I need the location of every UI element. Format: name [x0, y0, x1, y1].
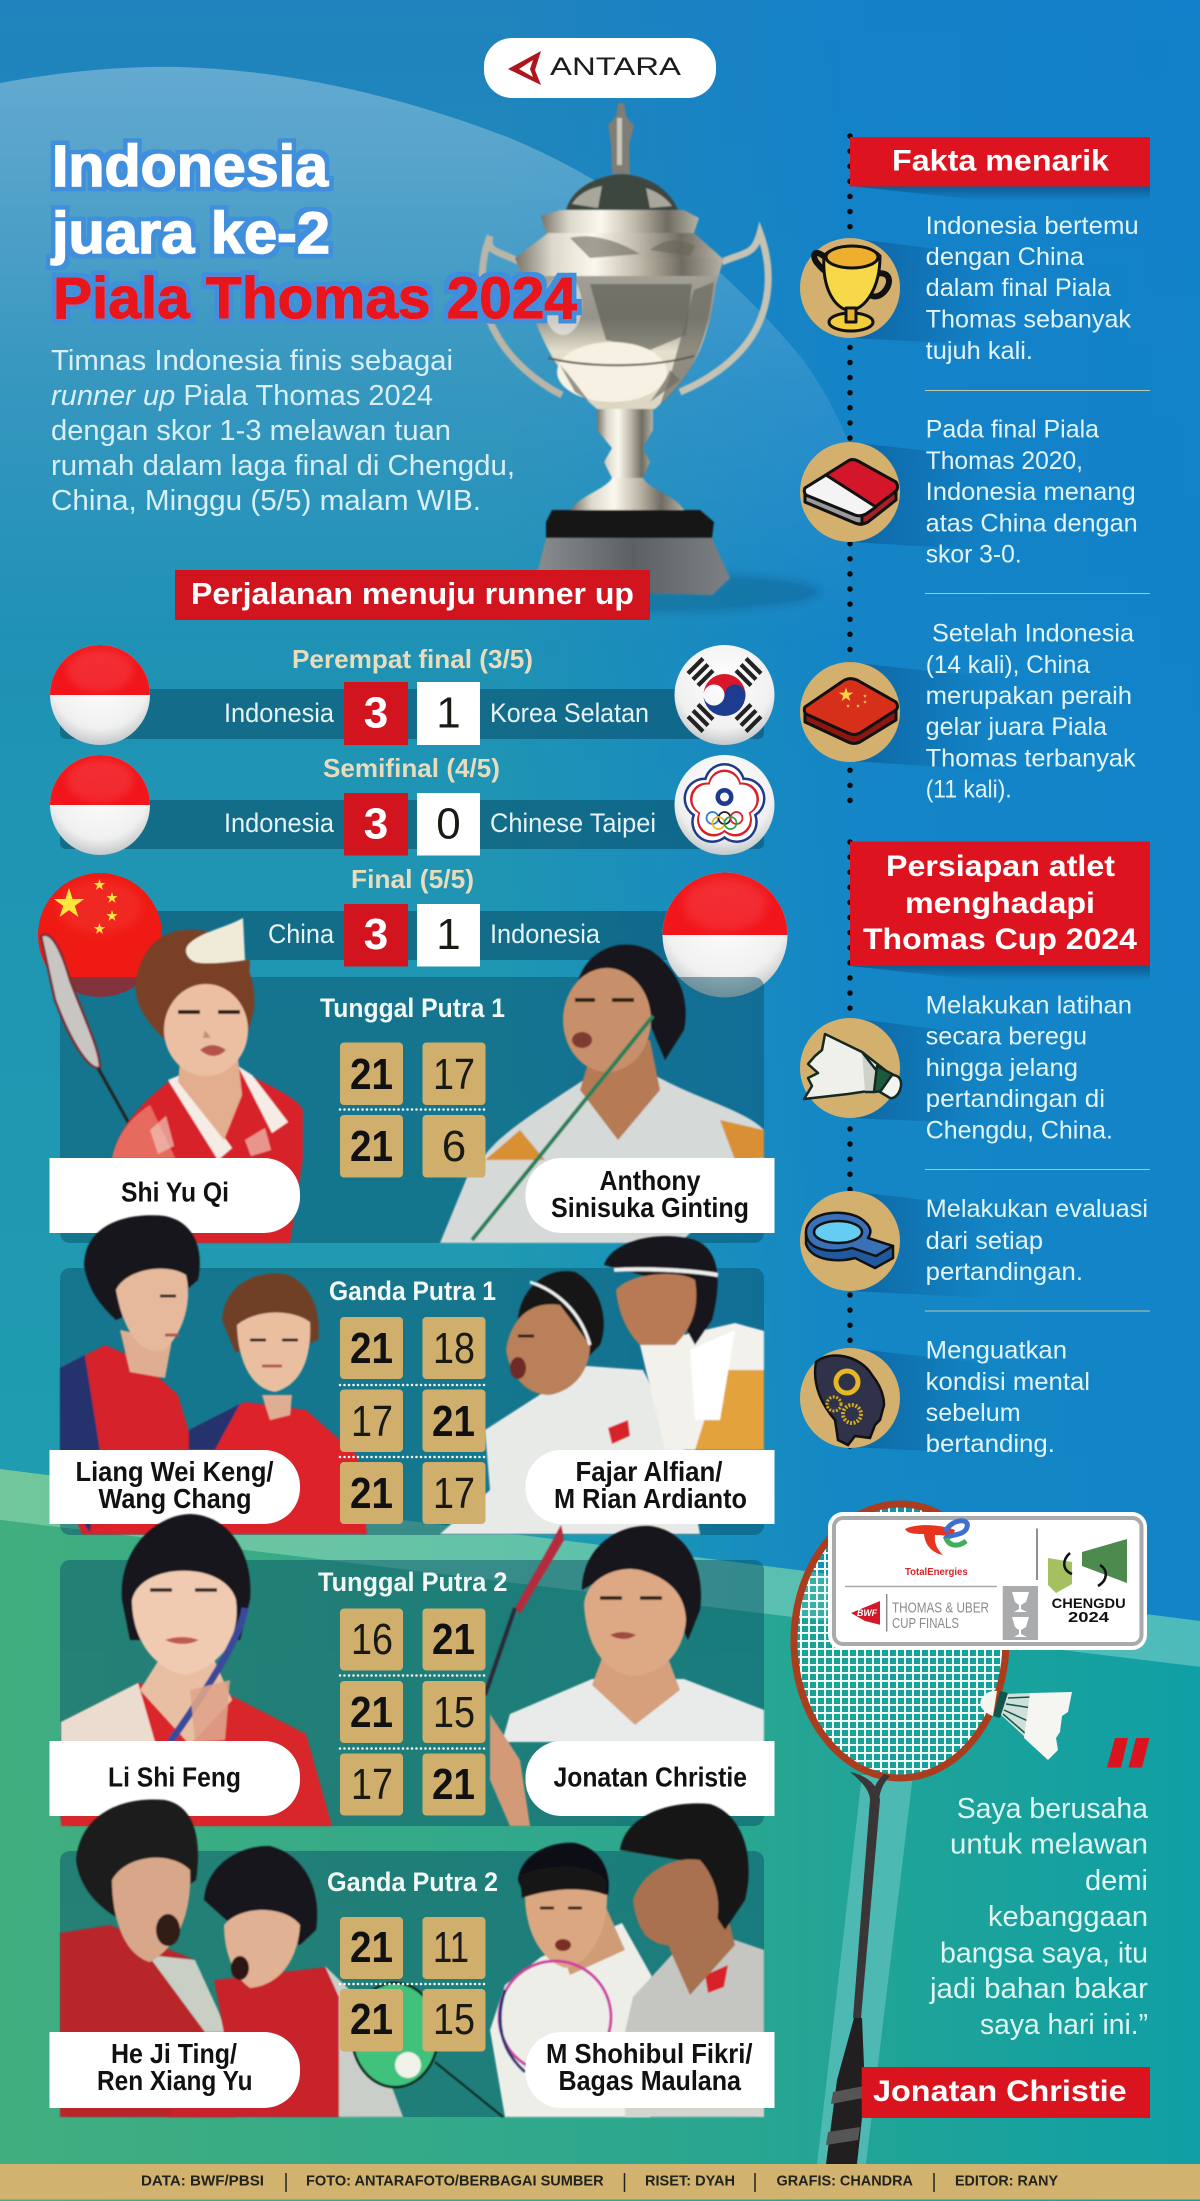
fact 3: [800, 662, 990, 770]
logo: BWF: BWF: [857, 1608, 877, 1618]
icon: antara arrow: [508, 51, 541, 85]
round: final: Final (5/5): [351, 864, 474, 894]
round: perempat final: [50, 644, 774, 745]
player photo: Liang Wei Keng: [60, 1215, 200, 1534]
name tab: Anthony Sinisuka Ginting: Sinisuka Ginting: [551, 1192, 749, 1223]
step 1 text: Melakukan latihan: [926, 992, 1132, 1020]
name tab: Fajar Alfian / M Rian Ardianto: M Rian Ardianto: [554, 1483, 747, 1514]
score boxes: 17: [351, 1397, 393, 1446]
logo: BWF: [851, 1601, 880, 1625]
fact 2 text: Indonesia menang: [926, 478, 1136, 506]
panel: Tunggal Putra 2: [50, 1514, 774, 1826]
logo box: Thomas & Uber Cup Finals: [828, 1512, 1147, 1650]
fact 1 text: dalam final Piala: [926, 274, 1111, 302]
heading: Ganda Putra 2: Ganda Putra 2: [327, 1867, 498, 1897]
fact 3 text: [926, 620, 1136, 804]
quote: [862, 1738, 1150, 2118]
fact 1 text: Indonesia bertemu: [926, 212, 1139, 240]
logo text: Thomas and Uber Cup Finals: [892, 1599, 989, 1632]
player photo: Anthony Sinisuka Ginting: [440, 945, 764, 1243]
heading: Fakta menarik: [850, 137, 1150, 200]
name tab: Liang Wei Keng / Wang Chang: [50, 1450, 300, 1524]
round: final: 1: [436, 910, 461, 959]
score boxes: 6: [442, 1122, 466, 1171]
fact 2: [800, 442, 990, 550]
heading: Persiapan atlet menghadapi Thomas Cup 2024: menghadapi: [905, 887, 1095, 920]
icon: quote mark: [1107, 1738, 1150, 1768]
name tab: Li Shi Feng: [50, 1741, 300, 1816]
name tab: M Shohibul Fikri / Bagas Maulana: [526, 2032, 774, 2108]
round: final: 3: [364, 910, 388, 959]
player photo: Fajar Alfian: [440, 1271, 700, 1534]
icon: shuttlecock near racket: [980, 1691, 1072, 1760]
panel: Persiapan atlet: [800, 842, 1150, 1458]
intro text: rumah dalam laga final di Chengdu,: [51, 450, 515, 482]
icon: trophy: [814, 246, 889, 331]
logo: ANTARA: [484, 38, 716, 98]
name tab: Shi Yu Qi: [50, 1158, 300, 1233]
round: final: Indonesia: [490, 919, 601, 949]
name tab: Anthony Sinisuka Ginting: [526, 1158, 774, 1233]
fact 2 text: [926, 416, 1138, 569]
logo: Chengdu 2024: [1048, 1539, 1127, 1626]
logo text: Thomas and Uber Cup Finals: THOMAS & UBER: [892, 1599, 989, 1616]
intro text: dengan skor 1-3 melawan tuan: [51, 415, 451, 447]
step 1 text: pertandingan di: [926, 1085, 1105, 1113]
quote text: jadi bahan bakar: [929, 1973, 1148, 2005]
heading: Persiapan atlet menghadapi Thomas Cup 2024: [850, 842, 1150, 980]
name tab: Li Shi Feng: Li Shi Feng: [108, 1762, 241, 1792]
footer credits: DATA: BWF/PBSI: [141, 2173, 264, 2190]
name tab: Fajar Alfian / M Rian Ardianto: Fajar Alfian/: [576, 1456, 723, 1487]
quote text: kebanggaan: [988, 1901, 1148, 1933]
quote attribution: Jonatan Christie: [873, 2075, 1127, 2108]
heading: Tunggal Putra 1: Tunggal Putra 1: [320, 993, 505, 1023]
flag: China: [38, 873, 162, 997]
quote text: untuk melawan: [950, 1829, 1148, 1861]
score boxes: 15: [433, 1995, 475, 2044]
step 3 text: bertanding.: [926, 1430, 1055, 1458]
intro text: runner up Piala Thomas 2024: [51, 380, 433, 412]
round: perempat final: 1: [436, 688, 461, 738]
panel: Ganda Putra 2: [50, 1799, 774, 2117]
icon: head with gears: [815, 1356, 884, 1445]
step 2: [800, 1191, 990, 1298]
step 3 text: sebelum: [926, 1399, 1021, 1427]
quote text: bangsa saya, itu: [940, 1938, 1148, 1970]
fact 1 text: Thomas sebanyak: [926, 306, 1131, 334]
panel: Ganda Putra 1: [50, 1215, 774, 1534]
name tab: M Shohibul Fikri / Bagas Maulana: M Shohibul Fikri/: [546, 2038, 753, 2069]
panel: Fakta menarik: [800, 137, 1150, 804]
player photo: He Ji Ting: [60, 1799, 235, 2117]
name tab: Jonatan Christie: [526, 1741, 774, 1816]
footer credits: [0, 2164, 1200, 2200]
player photo: Bagas Maulana: [620, 1803, 764, 2117]
score boxes: 21: [432, 1760, 475, 1809]
score boxes: [340, 1042, 486, 1178]
icon: shuttlecock: [804, 1034, 901, 1099]
fact 3 text: merupakan peraih: [926, 682, 1132, 710]
round: perempat final: Korea Selatan: [490, 698, 649, 728]
round: semifinal: Semifinal (4/5): [323, 753, 500, 783]
score boxes: 16: [351, 1615, 393, 1664]
flag: Chinese Taipei: [674, 755, 774, 855]
step 2 text: dari setiap: [926, 1227, 1043, 1255]
name tab: Liang Wei Keng / Wang Chang: Liang Wei Keng/: [76, 1456, 274, 1487]
name tab: He Ji Ting / Ren Xiang Yu: Ren Xiang Yu: [97, 2065, 252, 2096]
intro text: [51, 345, 515, 517]
fact 2 text: atas China dengan: [926, 509, 1138, 537]
fact 3 text: gelar juara Piala: [926, 713, 1107, 741]
fact 1 text: [926, 212, 1139, 365]
player photo: Wang Chang: [82, 1273, 367, 1534]
fact 1 text: tujuh kali.: [926, 337, 1033, 365]
fact 2 text: skor 3-0.: [926, 541, 1022, 569]
heading: Ganda Putra 1: Ganda Putra 1: [329, 1276, 496, 1306]
step 1: [800, 1018, 990, 1124]
heading: Perjalanan menuju runner up: [175, 570, 650, 620]
round: semifinal: [50, 753, 774, 856]
flag: Indonesia: [50, 755, 150, 855]
fact 3 text: Thomas terbanyak: [926, 744, 1136, 772]
step 3 text: kondisi mental: [926, 1368, 1090, 1396]
round: semifinal: Chinese Taipei: [490, 808, 656, 838]
quote text: [929, 1793, 1149, 2041]
name tab: Fajar Alfian / M Rian Ardianto: [526, 1450, 774, 1524]
fact 2 text: Pada final Piala: [926, 416, 1099, 444]
name tab: Shi Yu Qi: Shi Yu Qi: [121, 1176, 229, 1208]
logo: Chengdu 2024: CHENGDU: [1052, 1596, 1126, 1611]
flag: Indonesia: [662, 872, 788, 998]
title: juara ke-2: [51, 201, 330, 266]
step 2 text: pertandingan.: [926, 1258, 1083, 1286]
step 1 text: hingga jelang: [926, 1054, 1078, 1082]
footer credits: RISET: DYAH: [645, 2173, 735, 2190]
score boxes: [340, 1608, 486, 1816]
name tab: Jonatan Christie: Jonatan Christie: [554, 1762, 747, 1792]
racket illustration: [790, 1500, 1010, 2164]
quote text: saya hari ini.”: [980, 2009, 1148, 2041]
panel backgrounds: [60, 977, 764, 2117]
step 1 text: secara beregu: [926, 1023, 1087, 1051]
player photo: Li Shi Feng: [61, 1514, 332, 1826]
player photo: M Shohibul Fikri: [490, 1843, 665, 2117]
fact 2 text: Thomas 2020,: [926, 447, 1083, 475]
logo: ANTARA: ANTARA: [550, 53, 681, 81]
footer credits: EDITOR: RANY: [955, 2173, 1058, 2190]
score boxes: [340, 1917, 486, 2052]
icon: Indonesia flag block: [804, 460, 898, 524]
flag: Indonesia: [50, 645, 150, 745]
player photo: Jonatan Christie: [485, 1525, 764, 1826]
score boxes: 18: [433, 1324, 475, 1373]
timeline dots: [847, 136, 853, 1460]
footer credits: FOTO: ANTARAFOTO/BERBAGAI SUMBER: [306, 2173, 604, 2190]
score boxes: 21: [350, 1688, 393, 1737]
fact 1: [800, 238, 990, 345]
footer credits: GRAFIS: CHANDRA: [776, 2173, 913, 2190]
panel: Tunggal Putra 1: [41, 918, 774, 1243]
flag: Korea Selatan: [674, 645, 774, 745]
step 1 text: [926, 992, 1132, 1144]
score boxes: 11: [433, 1923, 469, 1972]
round: perempat final: Perempat final (3/5): [292, 644, 533, 674]
icon: magnifier: [806, 1213, 893, 1268]
fact 1 text: dengan China: [926, 243, 1084, 271]
score boxes: 21: [350, 1050, 393, 1099]
logo text: Thomas and Uber Cup Finals: CUP FINALS: [892, 1615, 959, 1632]
score boxes: 21: [350, 1324, 393, 1373]
round: semifinal: 0: [436, 800, 461, 848]
fact 3 text: Setelah Indonesia: [932, 620, 1134, 648]
round: final: China: [268, 919, 335, 949]
step 3 text: Menguatkan: [926, 1337, 1067, 1365]
score boxes: 21: [432, 1397, 475, 1446]
player photo: Ren Xiang Yu: [168, 1846, 403, 2117]
quote attribution: [862, 2067, 1150, 2118]
intro text: Timnas Indonesia finis sebagai: [51, 345, 453, 377]
score boxes: 17: [433, 1469, 475, 1518]
quote text: demi: [1085, 1865, 1148, 1897]
heading: Fakta menarik: Fakta menarik: [892, 144, 1109, 178]
player photo: Shi Yu Qi: [41, 918, 303, 1243]
title: [51, 134, 577, 331]
step 2 text: Melakukan evaluasi: [926, 1195, 1148, 1223]
name tab: Anthony Sinisuka Ginting: Anthony: [600, 1165, 701, 1196]
name tab: He Ji Ting / Ren Xiang Yu: He Ji Ting/: [111, 2038, 237, 2069]
title: Piala Thomas 2024: [53, 266, 577, 331]
step 3: [800, 1348, 990, 1454]
name tab: Liang Wei Keng / Wang Chang: Wang Chang: [98, 1483, 252, 1514]
logo: Chengdu 2024: 2024: [1068, 1610, 1109, 1626]
heading: Tunggal Putra 2: Tunggal Putra 2: [318, 1567, 508, 1597]
logo: TotalEnergies: TotalEnergies: [905, 1567, 968, 1578]
fact 3 text: (14 kali), China: [926, 651, 1090, 679]
score boxes: 17: [351, 1760, 393, 1809]
trophy photo: [480, 103, 820, 612]
score boxes: 21: [432, 1615, 475, 1664]
title: Indonesia: [52, 134, 329, 199]
score boxes: 21: [350, 1469, 393, 1518]
score boxes: 21: [350, 1923, 393, 1972]
score boxes: 21: [350, 1995, 393, 2044]
logo: TotalEnergies: [905, 1521, 968, 1578]
intro text: China, Minggu (5/5) malam WIB.: [51, 485, 481, 517]
score boxes: 17: [433, 1050, 475, 1099]
badge: trophies: [1003, 1586, 1038, 1640]
round: semifinal: Indonesia: [224, 808, 335, 838]
score boxes: 21: [350, 1122, 393, 1171]
icon: shuttlecock: [186, 918, 245, 963]
quote text: Saya berusaha: [957, 1793, 1149, 1825]
score boxes: [340, 1317, 486, 1524]
step 3 text: [926, 1337, 1090, 1458]
icon: China flag block: [804, 679, 898, 744]
racket: green: [352, 1983, 503, 2117]
name tab: He Ji Ting / Ren Xiang Yu: [50, 2032, 300, 2108]
heading: Perjalanan menuju runner up: Perjalanan menuju runner up: [191, 576, 634, 611]
round: perempat final: 3: [364, 688, 388, 738]
heading: Persiapan atlet menghadapi Thomas Cup 2024: Persiapan atlet: [886, 850, 1115, 883]
fact 3 text: (11 kali).: [926, 776, 1012, 804]
score boxes: 15: [433, 1688, 475, 1737]
round: perempat final: Indonesia: [224, 698, 335, 728]
step 1 text: Chengdu, China.: [926, 1116, 1113, 1144]
name tab: M Shohibul Fikri / Bagas Maulana: Bagas Maulana: [558, 2065, 741, 2096]
player photo: M Rian Ardianto: [604, 1236, 764, 1450]
step 2 text: [926, 1195, 1148, 1286]
heading: Persiapan atlet menghadapi Thomas Cup 2024: Thomas Cup 2024: [863, 923, 1137, 956]
round: final: [38, 864, 788, 998]
round: semifinal: 3: [364, 800, 388, 848]
